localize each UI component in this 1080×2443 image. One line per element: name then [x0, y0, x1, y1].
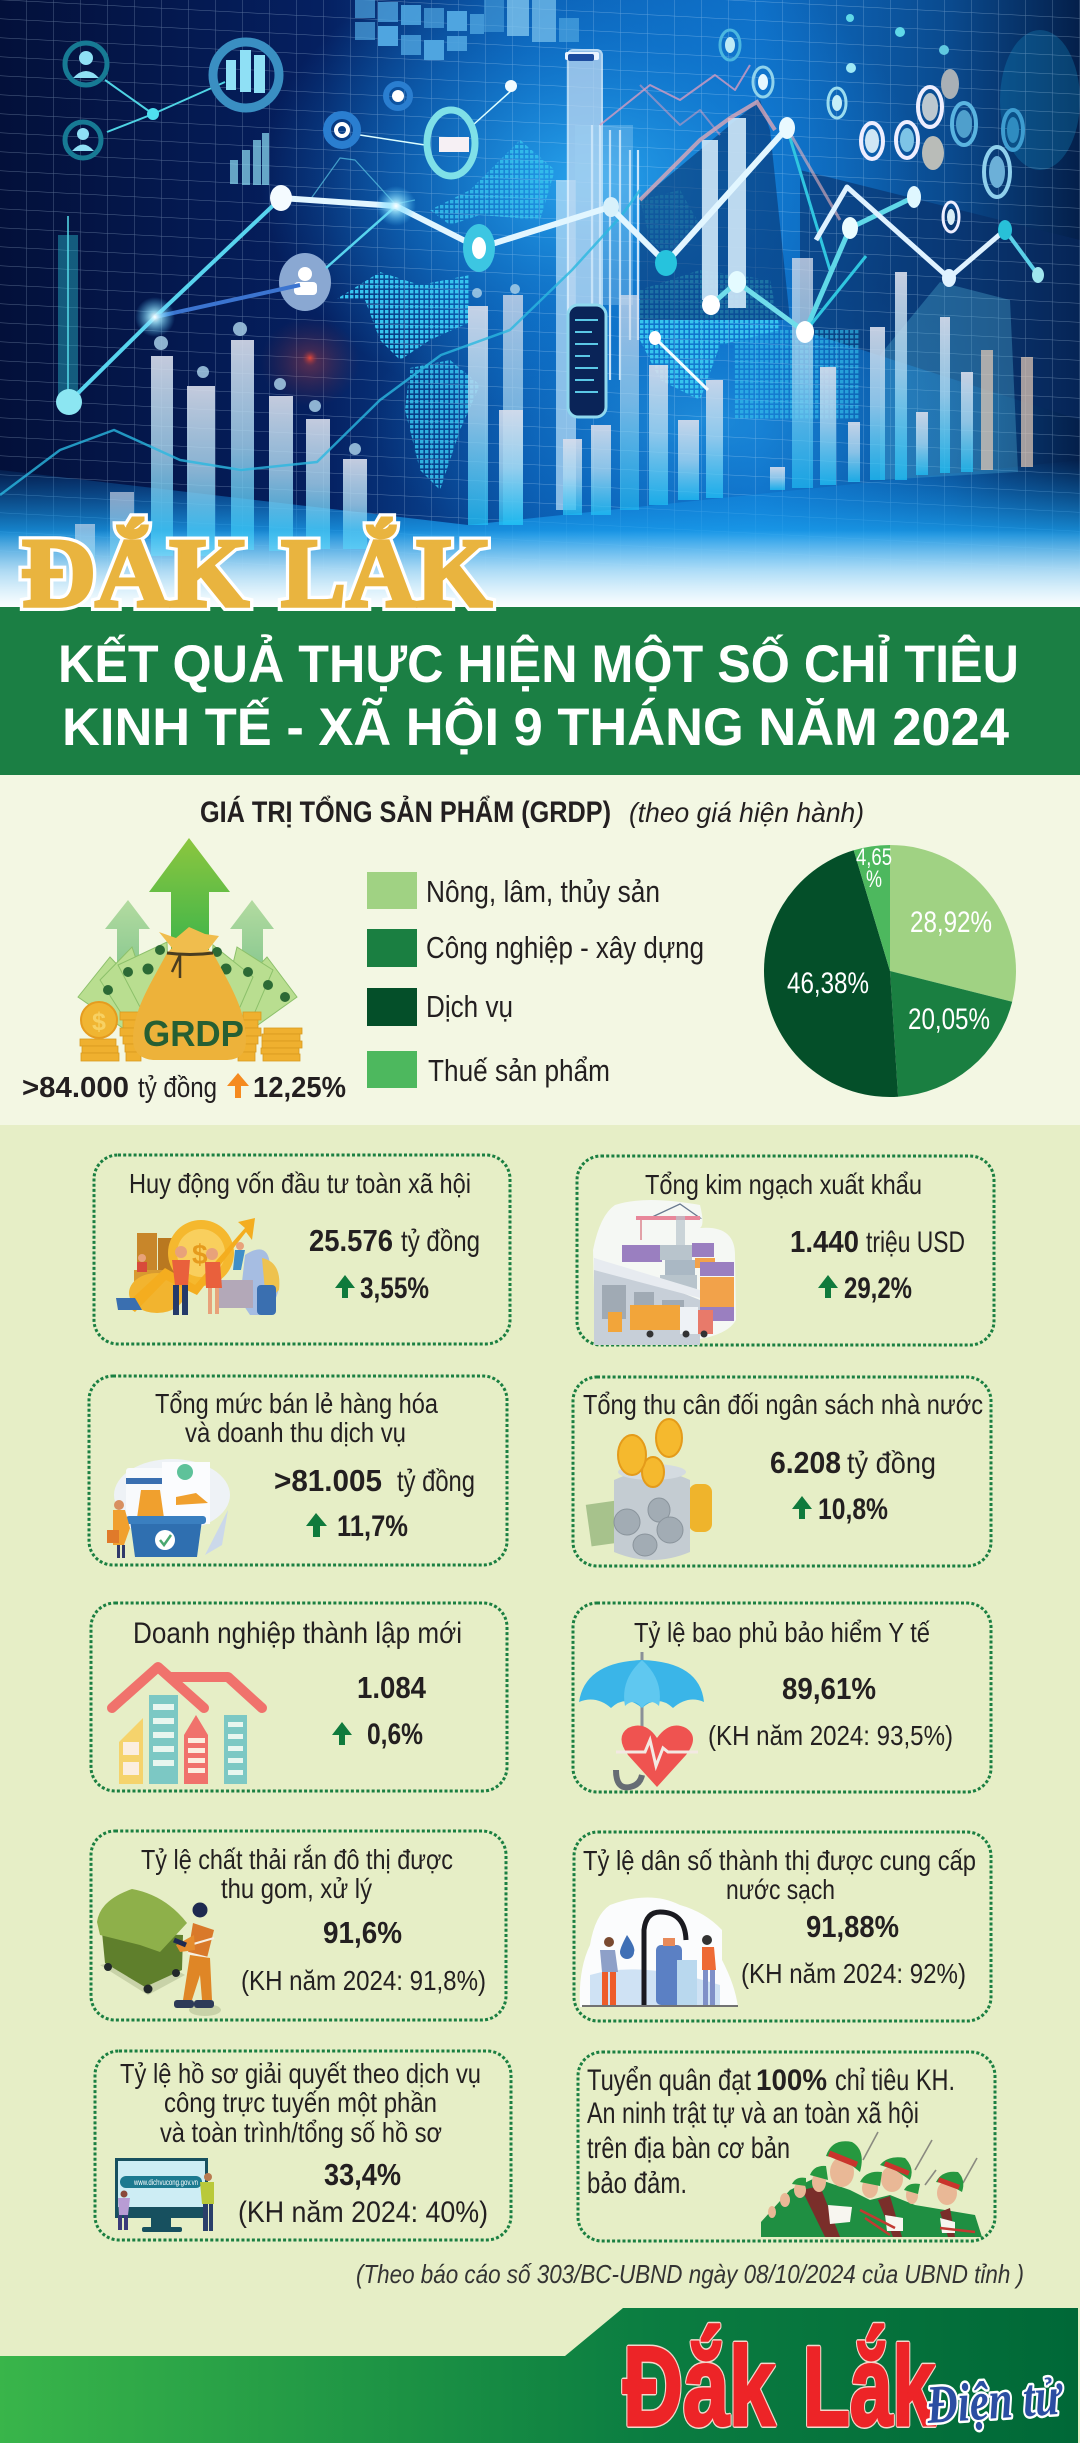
icon: marching soldiers: [761, 2132, 982, 2237]
footer band: [0, 2308, 1078, 2443]
panel: health insurance: (KH năm 2024: 93,5%): [708, 1720, 953, 1751]
icon: GRDP money bag: $: [92, 1008, 106, 1036]
world map dot blobs: [335, 140, 860, 490]
icon: umbrella and heart: [579, 1652, 704, 1787]
panel: retail sales: [107, 1388, 475, 1558]
panel: new enterprises: Doanh nghiệp thành lập mới: [133, 1617, 462, 1650]
panel: retail sales: và doanh thu dịch vụ: [185, 1417, 406, 1448]
trend lines: [0, 65, 1038, 495]
panel: health insurance: 89,61%: [782, 1671, 876, 1706]
panel: online public services: (KH năm 2024: 40%): [238, 2196, 488, 2229]
title line 1: KẾT QUẢ THỰC HIỆN MỘT SỐ CHỈ TIÊU: [58, 633, 1019, 694]
panel: investment capital: 3,55%: [360, 1272, 429, 1305]
panel: clean water: [580, 1845, 976, 2007]
GRDP heading: GIÁ TRỊ TỔNG SẢN PHẨM (GRDP): [200, 795, 611, 829]
province wordmark: [21, 517, 492, 628]
panel: investment capital: Huy động vốn đầu tư toàn xã hội: [129, 1168, 471, 1199]
icon: waste bin and worker: [97, 1889, 221, 2016]
pie chart: 20,05%: [908, 1003, 990, 1036]
bar top pins: [154, 284, 520, 455]
trend nodes: [56, 117, 1044, 415]
title banner: [0, 607, 1080, 775]
province wordmark: ĐẮK: [21, 517, 249, 628]
pie chart: 28,92%: [910, 906, 992, 939]
legend: Nông, lâm, thủy sản: [426, 874, 660, 909]
icon: warehouse containers trucks: [593, 1200, 736, 1345]
legend: Dịch vụ: [426, 989, 513, 1024]
panel: online public services: và toàn trình/tổng số hồ sơ: [160, 2117, 442, 2148]
floor glow: [0, 460, 1080, 610]
GRDP total: >84.000: [22, 1072, 129, 1104]
panel: retail sales: >81.005: [274, 1463, 382, 1498]
panel: online public services: Tỷ lệ hồ sơ giải quyết theo dịch vụ: [120, 2058, 481, 2089]
title line 2: KINH TẾ - XÃ HỘI 9 THÁNG NĂM 2024: [62, 696, 1010, 757]
newspaper logo: [623, 2324, 1065, 2443]
pie chart: 46,38%: [787, 967, 869, 1000]
panel: health insurance: Tỷ lệ bao phủ bảo hiểm Y tế: [634, 1617, 930, 1648]
panel: retail sales: tỷ đồng: [397, 1465, 475, 1498]
panel: new enterprises: 0,6%: [367, 1718, 423, 1751]
card frames: [89, 1155, 995, 2241]
panel: clean water: 91,88%: [806, 1909, 899, 1944]
panel: military and security: Tuyển quân đạt: [587, 2064, 752, 2097]
province wordmark: LẮK: [281, 517, 492, 628]
panel: clean water: Tỷ lệ dân số thành thị được cung cấp: [583, 1845, 976, 1876]
icon: GRDP money bag: [78, 838, 302, 1061]
icon nodes top-left: [65, 42, 512, 176]
panel: clean water: nước sạch: [726, 1874, 835, 1905]
panel: budget revenue: Tổng thu cân đối ngân sách nhà nước: [583, 1389, 983, 1420]
panel: clean water: (KH năm 2024: 92%): [741, 1958, 966, 1989]
pie chart: 4,65: [856, 844, 892, 871]
panel: retail sales: 11,7%: [337, 1510, 408, 1543]
GRDP total: 12,25%: [253, 1072, 346, 1104]
top block tiles: [355, 0, 579, 60]
GRDP total: tỷ đồng: [138, 1072, 217, 1104]
person bubble: [279, 253, 331, 311]
icon: investors and coins: $: [192, 1239, 208, 1270]
panel: investment capital: [116, 1168, 480, 1315]
GRDP note: (theo giá hiện hành): [629, 797, 864, 828]
panel: military and security: bảo đảm.: [587, 2167, 687, 2200]
panel: budget revenue: 6.208: [770, 1445, 841, 1480]
panel: health insurance: [579, 1617, 953, 1787]
panel: military and security: [587, 2064, 982, 2237]
panel: solid waste: (KH năm 2024: 91,8%): [241, 1965, 486, 1996]
pie chart: %: [866, 866, 882, 893]
bars: [75, 258, 1033, 564]
icon: GRDP money bag: GRDP: [143, 1013, 244, 1054]
icon: monitor and website: [115, 2158, 214, 2232]
icon: shopping basket: [107, 1459, 230, 1558]
central towers and device: [556, 50, 1018, 510]
panel: export turnover: Tổng kim ngạch xuất khẩu: [645, 1169, 922, 1200]
panel: solid waste: Tỷ lệ chất thải rắn đô thị được: [141, 1844, 453, 1875]
panel: investment capital: tỷ đồng: [401, 1225, 480, 1258]
panel: budget revenue: 10,8%: [818, 1493, 888, 1526]
hub rings top-right: [720, 30, 1023, 232]
province wordmark: LẮK: [281, 517, 492, 628]
panel: new enterprises: 1.084: [357, 1670, 427, 1705]
panel: export turnover: [593, 1169, 965, 1345]
panel: solid waste: thu gom, xử lý: [221, 1873, 372, 1904]
pie chart: [764, 844, 1016, 1097]
GRDP total: [22, 1072, 346, 1104]
icon: city buildings under roof: [112, 1667, 262, 1784]
panel: solid waste: 91,6%: [323, 1915, 402, 1950]
icon: monitor and website: www.dichvucong.gov.vn: [133, 2178, 198, 2187]
province wordmark: ĐẮK: [21, 517, 249, 628]
panel: budget revenue: tỷ đồng: [847, 1447, 936, 1480]
legend: [367, 872, 704, 1088]
panel: online public services: 33,4%: [324, 2157, 401, 2192]
panel: online public services: [115, 2058, 488, 2232]
GRDP section: [22, 795, 1016, 1104]
icon: coin jar: [586, 1419, 712, 1560]
panel: solid waste: [97, 1844, 486, 2016]
legend: Thuế sản phẩm: [428, 1053, 610, 1088]
hero: digital data chart backdrop: [0, 0, 1080, 610]
panel: military and security: trên địa bàn cơ bản: [587, 2132, 790, 2165]
panel: online public services: công trực tuyến một phần: [164, 2087, 437, 2118]
panel: export turnover: 29,2%: [844, 1272, 912, 1305]
panel: military and security: 100%: [756, 2064, 827, 2097]
panel: retail sales: Tổng mức bán lẻ hàng hóa: [155, 1388, 438, 1419]
panel: military and security: An ninh trật tự và an toàn xã hội: [587, 2097, 919, 2130]
panel: export turnover: triệu USD: [866, 1226, 965, 1259]
panel: new enterprises: [112, 1617, 462, 1784]
icon: faucet and water: [580, 1898, 738, 2007]
panel: investment capital: 25.576: [309, 1223, 393, 1258]
panel: military and security: chỉ tiêu KH.: [835, 2064, 955, 2097]
legend: Công nghiệp - xây dựng: [426, 930, 704, 965]
panel: export turnover: 1.440: [790, 1224, 859, 1259]
panel: budget revenue: [583, 1389, 983, 1560]
icon: investors and coins: [116, 1218, 279, 1315]
